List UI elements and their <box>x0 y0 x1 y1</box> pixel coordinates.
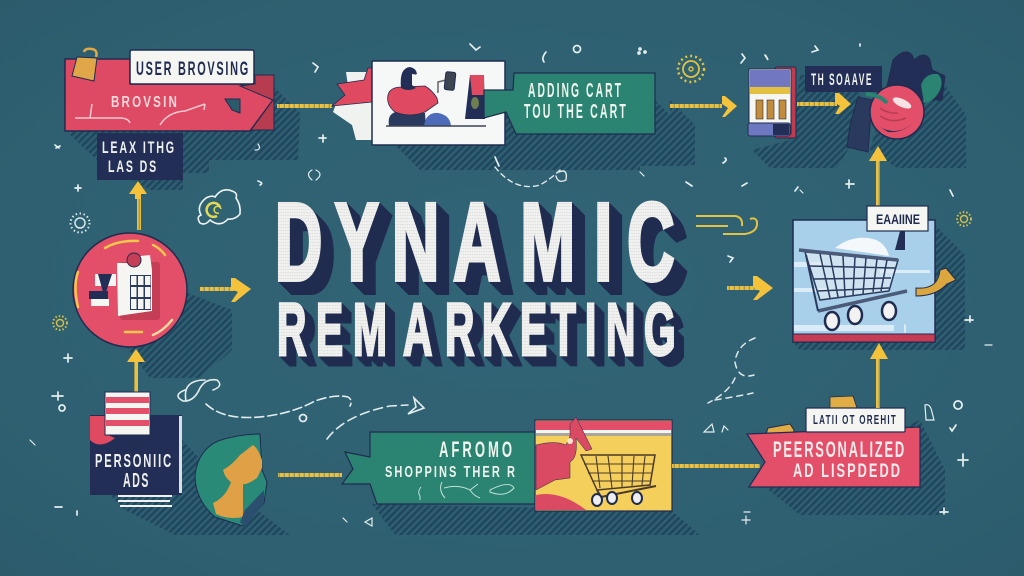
icon: yellow swoosh <box>696 216 757 234</box>
arrow: cart to checkout <box>670 96 737 117</box>
panel: adding to cart <box>332 61 655 145</box>
frame <box>793 220 935 342</box>
icon: shopping cart <box>799 250 907 330</box>
title: remarketing: REMARKETING <box>277 288 676 371</box>
rim dashes <box>76 241 172 335</box>
arrow: portrait to banner <box>278 473 342 477</box>
red strip <box>793 334 935 342</box>
dashed path: right middle <box>708 338 755 403</box>
device back <box>775 67 796 138</box>
icon: padlock <box>72 49 97 81</box>
image: hand <box>536 417 592 510</box>
green banner <box>342 432 537 504</box>
device screen <box>749 69 791 134</box>
banner text: PEERSONALIZED <box>773 437 906 462</box>
icon: sun small left <box>53 316 67 330</box>
banner text <box>773 437 906 482</box>
banner fold <box>240 75 274 130</box>
arrow: personalized up to cart <box>870 343 888 408</box>
banner text: AFROMO <box>439 437 515 462</box>
banner squiggles <box>419 482 514 500</box>
banner text <box>524 80 628 123</box>
striped paper <box>105 392 150 435</box>
red shape <box>90 416 115 445</box>
note: navy box: LAS DS <box>108 157 158 176</box>
device base <box>748 123 790 136</box>
hatch shadows <box>68 60 966 535</box>
image: cart <box>581 455 656 506</box>
icon: sun small right <box>957 212 971 226</box>
label: save: TH SOAAVE <box>811 70 873 89</box>
icon: cloud with G <box>198 190 240 224</box>
terminal <box>117 253 160 320</box>
dashed path: lower left <box>178 380 424 439</box>
panel: personalized ads card <box>90 392 182 507</box>
icon: sun top right <box>678 56 704 82</box>
sun <box>835 238 889 256</box>
image panel <box>535 420 672 511</box>
title <box>275 182 676 371</box>
label: save <box>805 66 882 92</box>
icon: horn <box>916 268 956 296</box>
panel: user browsing <box>65 49 274 180</box>
dashed path: top centre <box>495 167 566 187</box>
icon: person portrait <box>195 434 267 527</box>
card text: ADS <box>123 470 150 492</box>
icon: sun left <box>70 214 90 232</box>
banner caption: BROVSIN <box>111 94 179 111</box>
arrow: device to glove <box>797 93 851 114</box>
disc <box>73 233 187 347</box>
red banner <box>747 427 920 487</box>
icon: glove <box>847 52 945 152</box>
panel: personalized ad <box>747 396 920 487</box>
banner text: TOU THE CART <box>524 101 628 123</box>
yellow tag <box>764 424 794 440</box>
card reader <box>89 274 116 306</box>
product bottle <box>465 75 485 119</box>
device keys <box>756 100 786 119</box>
panel: circle terminal <box>73 233 187 347</box>
note: navy box <box>97 133 183 180</box>
green banner <box>484 73 655 134</box>
illustration: person with phone <box>386 67 486 126</box>
lines <box>118 495 172 507</box>
label <box>867 206 928 250</box>
banner notch <box>225 99 240 113</box>
arrow: ads up to circle <box>127 349 145 398</box>
banner scribbles <box>75 104 205 125</box>
card text <box>95 451 173 492</box>
white label <box>806 408 905 432</box>
arrow: circle to right <box>200 278 251 302</box>
decorative sparks <box>30 44 992 526</box>
white edge <box>179 416 182 493</box>
title: dynamic: DYNAMIC <box>275 182 675 304</box>
note: navy box: LEAX ITHG <box>102 138 176 157</box>
navy card <box>90 415 182 495</box>
label: user browsing: USER BROVSING <box>136 59 250 80</box>
banner text <box>385 437 517 481</box>
arrow: into cart image <box>727 276 773 300</box>
arrow: cart image up to glove <box>869 146 887 206</box>
label: user browsing <box>130 50 254 84</box>
card text: PERSONIIC <box>95 451 173 471</box>
panel: shopping banner <box>342 417 672 511</box>
folder <box>830 396 857 408</box>
banner text: SHOPPINS THER R <box>385 464 517 481</box>
ribbon <box>332 68 372 140</box>
panel: cart image <box>793 206 956 342</box>
label: EAAIINE <box>876 211 920 227</box>
banner text: AD LISPDEDD <box>793 461 902 482</box>
cloud streaks <box>794 262 930 331</box>
banner text: ADDING CART <box>528 80 623 102</box>
red banner <box>65 59 273 131</box>
panel: checkout device <box>748 67 796 138</box>
arrow: circle up to note <box>129 181 147 230</box>
arrow: banner to personalized <box>672 464 760 468</box>
white label: LATII OT OREHIT <box>813 412 897 427</box>
image frame <box>372 61 505 145</box>
arrow: browsing to cart <box>277 104 332 108</box>
